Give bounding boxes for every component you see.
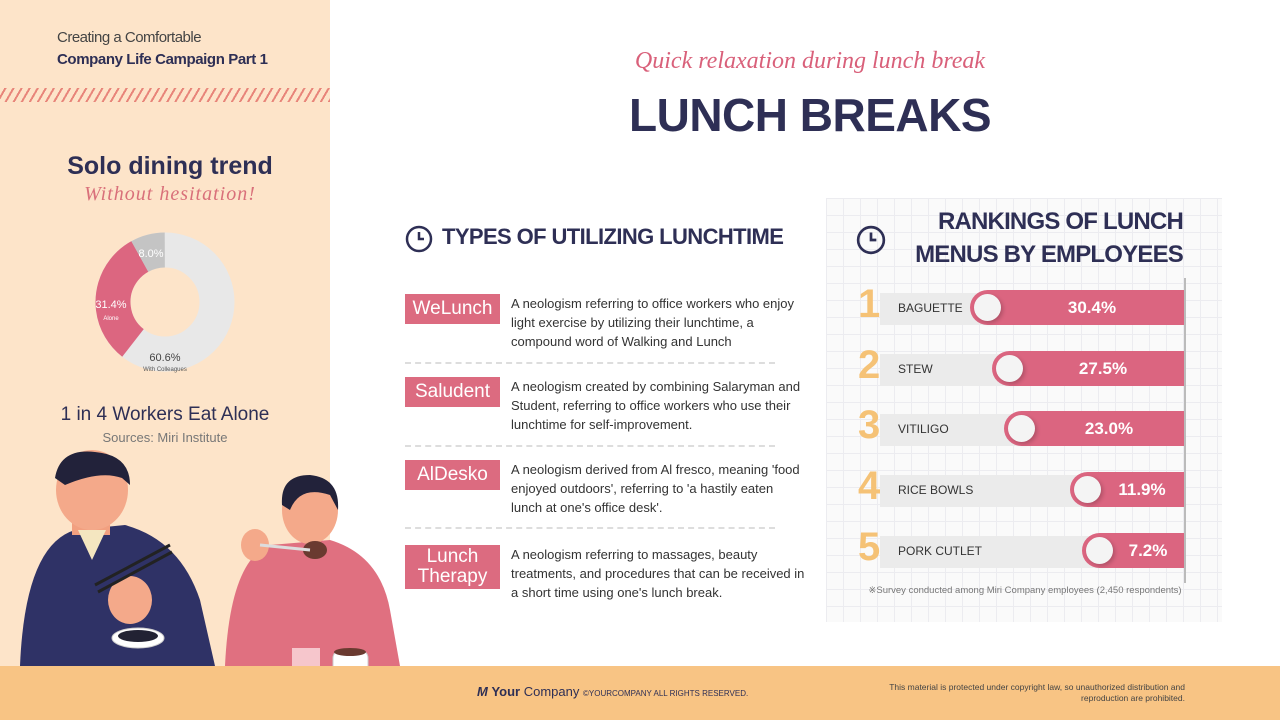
bar chart: rankings: STEW: [898, 362, 933, 376]
campaign heading: Company Life Campaign Part 1: [57, 51, 268, 68]
stat text: 1 in 4 Workers Eat Alone: [61, 404, 269, 425]
subtitle script: Quick relaxation during lunch break: [635, 48, 985, 74]
bar chart: rankings: 7.2%: [1129, 541, 1167, 560]
bar chart: rankings: 4: [858, 464, 880, 508]
bar chart: rankings: 3: [858, 403, 880, 447]
item: AlDesko: A neologism derived from Al fresco, meaning 'food enjoyed outdoors', referring to 'a hastily eaten lunch at one's office desk'.: [511, 462, 800, 515]
item: Saludent: A neologism created by combining Salaryman and Student, referring to office workers who use their lunchtime for self-improvement.: [511, 379, 800, 432]
solo dining title: [67, 152, 273, 205]
item: WeLunch: A neologism referring to office workers who enjoy light exercise by utilizing their lunchtime, a compound word of Walking and Lunch: [511, 296, 794, 349]
item: Lunch Therapy: Therapy: [418, 566, 487, 587]
bar chart: rankings: PORK CUTLET: [898, 544, 982, 558]
panel: rankings: [826, 198, 1222, 622]
donut chart: 31.4%: [95, 299, 127, 311]
striped divider: [0, 88, 330, 102]
item: Lunch Therapy: A neologism referring to massages, beauty treatments, and procedures that can be received in a short time using one's lunch break.: [511, 547, 804, 600]
vertical axis: [1184, 278, 1186, 583]
solo dining title: Without hesitation!: [84, 183, 256, 205]
campaign heading: Creating a Comfortable: [57, 29, 201, 46]
campaign heading: [57, 29, 268, 68]
illustration: workers eating: [20, 450, 400, 666]
solo dining title: Solo dining trend: [67, 152, 273, 180]
bar chart: rankings: VITILIGO: [898, 422, 949, 436]
woman: [225, 475, 400, 688]
bar chart: rankings: [858, 282, 1184, 569]
section heading: types: TYPES OF UTILIZING LUNCHTIME: [442, 224, 783, 249]
stat text: [61, 404, 269, 445]
bar chart: rankings: 30.4%: [1068, 298, 1116, 317]
man: [20, 450, 215, 695]
rankings heading: MENUS BY EMPLOYEES: [915, 241, 1183, 268]
bar chart: rankings: BAGUETTE: [898, 301, 963, 315]
donut chart: With Colleagues: [143, 367, 187, 373]
item: Lunch Therapy: Lunch: [427, 546, 478, 567]
bar chart: rankings: 23.0%: [1085, 419, 1133, 438]
icon: clock: [406, 226, 432, 252]
bar chart: rankings: RICE BOWLS: [898, 483, 973, 497]
bar chart: rankings: 11.9%: [1118, 480, 1166, 499]
rankings heading: [915, 208, 1183, 268]
donut chart: [95, 232, 234, 373]
donut chart: Alone: [103, 316, 119, 322]
stat text: Sources: Miri Institute: [102, 430, 228, 445]
item: Saludent: Saludent: [415, 381, 490, 402]
donut chart: 60.6%: [149, 352, 181, 364]
bar chart: rankings: 1: [858, 282, 880, 326]
bar chart: rankings: 5: [858, 525, 880, 569]
survey note: ※Survey conducted among Miri Company employees (2,450 respondents): [868, 585, 1182, 596]
donut chart: 8.0%: [138, 248, 164, 260]
left panel background: [0, 0, 330, 666]
item: WeLunch: WeLunch: [413, 298, 492, 319]
main title: LUNCH BREAKS: [629, 89, 991, 141]
rankings heading: RANKINGS OF LUNCH: [938, 208, 1183, 235]
icon: clock: [856, 226, 886, 254]
bar chart: rankings: 2: [858, 343, 880, 387]
bar chart: rankings: 27.5%: [1079, 359, 1127, 378]
item: AlDesko: AlDesko: [417, 464, 488, 485]
footer bar: [0, 666, 1280, 720]
footer notice: This material is protected under copyright law, so unauthorized distribution and reproduction are prohibited.: [889, 682, 1185, 703]
footer logo: M Your Company ©YOURCOMPANY ALL RIGHTS RESERVED.: [477, 684, 748, 699]
